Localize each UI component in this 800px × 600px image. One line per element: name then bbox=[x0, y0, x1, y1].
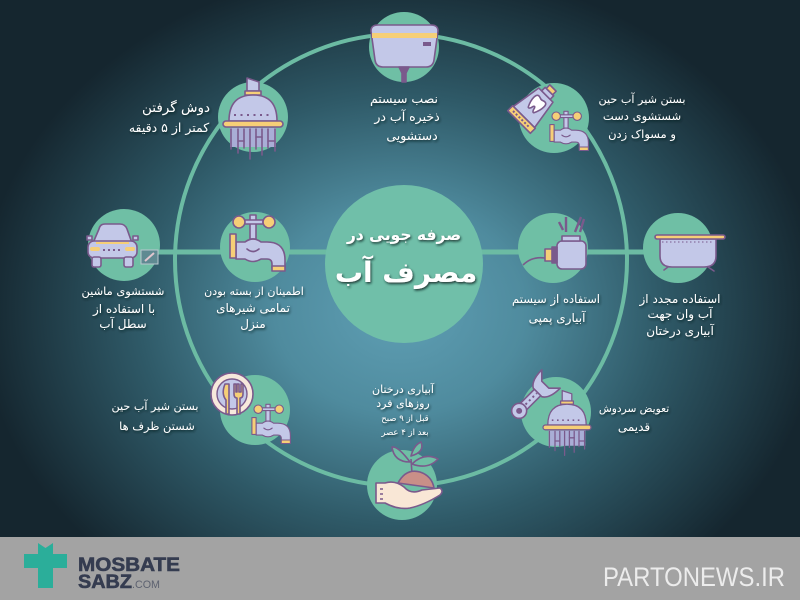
text: bath bbox=[639, 292, 720, 339]
text: check faucets: تمامی شیرهای bbox=[216, 301, 290, 316]
text: car wash: با استفاده از bbox=[92, 302, 155, 317]
text: tree watering: آبیاری درختان bbox=[372, 382, 435, 396]
text: shower: دوش گرفتن bbox=[142, 99, 210, 116]
text: pump: آبیاری پمپی bbox=[529, 310, 586, 326]
logo wordmark: MOSBATE bbox=[78, 554, 180, 576]
icon: tank bbox=[371, 25, 438, 82]
text: bath: آبیاری درختان bbox=[646, 323, 714, 339]
icon: pump bbox=[523, 217, 586, 269]
text: bath: استفاده مجدد از bbox=[639, 292, 720, 307]
text: pump bbox=[512, 292, 600, 326]
text: check faucets: منزل bbox=[240, 317, 266, 332]
text: shower bbox=[129, 99, 210, 136]
text: tree watering: روزهای فرد bbox=[376, 397, 430, 410]
text: bath: آب وان جهت bbox=[648, 306, 713, 322]
text: tree watering bbox=[372, 382, 435, 438]
panel: check faucets bbox=[204, 212, 304, 332]
panel: tree watering bbox=[367, 382, 442, 520]
text: toothbrushing: بستن شیر آب حین bbox=[598, 92, 686, 107]
text: tank: ذخیره آب در bbox=[373, 109, 440, 125]
text: car wash: سطل آب bbox=[99, 316, 147, 331]
text: dishes: بستن شیر آب حین bbox=[111, 399, 199, 414]
text: pump: استفاده از سیستم bbox=[512, 292, 600, 307]
icon: hand with plant bbox=[376, 442, 442, 508]
text: replace shower bbox=[599, 403, 669, 434]
text: check faucets bbox=[204, 285, 304, 332]
icon: bucket sign bbox=[141, 250, 158, 264]
panel: replace shower bbox=[505, 370, 669, 455]
heading: subtitle: صرفه جویی در bbox=[346, 226, 461, 244]
text: dishes bbox=[111, 399, 199, 434]
panel: centre title bbox=[325, 185, 483, 343]
text: toothbrushing: و مسواک زدن bbox=[608, 127, 676, 142]
panel: dishes faucet bbox=[111, 373, 290, 445]
icon: wrench bbox=[505, 370, 560, 425]
icon: shower bbox=[543, 391, 591, 455]
text: toothbrushing bbox=[598, 92, 686, 142]
text: check faucets: اطمینان از بسته بودن bbox=[204, 285, 304, 298]
text: tank: دستشویی bbox=[386, 128, 438, 144]
text: shower: کمتر از ۵ دقیقه bbox=[129, 120, 209, 136]
text: toothbrushing: شستشوی دست bbox=[603, 109, 681, 124]
icon: toothpaste bbox=[508, 77, 564, 133]
heading: main title: مصرف آب bbox=[335, 255, 477, 289]
panel: shower bbox=[129, 78, 288, 159]
icon: faucet bbox=[230, 215, 285, 271]
panel: toothbrushing faucet bbox=[508, 77, 686, 153]
icon: shower bbox=[223, 78, 283, 159]
panel: toilet tank bbox=[369, 12, 440, 144]
icon: faucet bbox=[550, 111, 588, 150]
panel: pump irrigation bbox=[512, 213, 600, 326]
icon: car bbox=[87, 224, 138, 267]
text: replace shower: تعویض سردوش bbox=[599, 403, 669, 415]
icon: plate and cutlery bbox=[211, 373, 253, 415]
text: tank: نصب سیستم bbox=[370, 91, 438, 107]
panel: reuse bath water bbox=[639, 213, 725, 339]
text: tank bbox=[370, 91, 440, 144]
text: dishes: شستن ظرف ها bbox=[119, 419, 195, 434]
icon: logo cross bbox=[24, 543, 67, 588]
logo wordmark: SABZ bbox=[78, 571, 132, 593]
text: car wash bbox=[82, 284, 164, 331]
text: replace shower: قدیمی bbox=[618, 420, 650, 434]
ring and spokes bbox=[123, 34, 680, 486]
text: tree watering: قبل از ۹ صبح bbox=[381, 414, 429, 424]
text: tree watering: بعد از ۴ عصر bbox=[380, 428, 429, 438]
logo wordmark: .COM bbox=[132, 579, 160, 591]
text: car wash: شستشوی ماشین bbox=[82, 284, 164, 299]
icon: bathtub bbox=[655, 235, 725, 271]
logo wordmark bbox=[78, 554, 180, 593]
icon: faucet bbox=[252, 404, 290, 444]
panel: footer bbox=[0, 537, 800, 600]
panel: car wash bbox=[82, 209, 164, 331]
